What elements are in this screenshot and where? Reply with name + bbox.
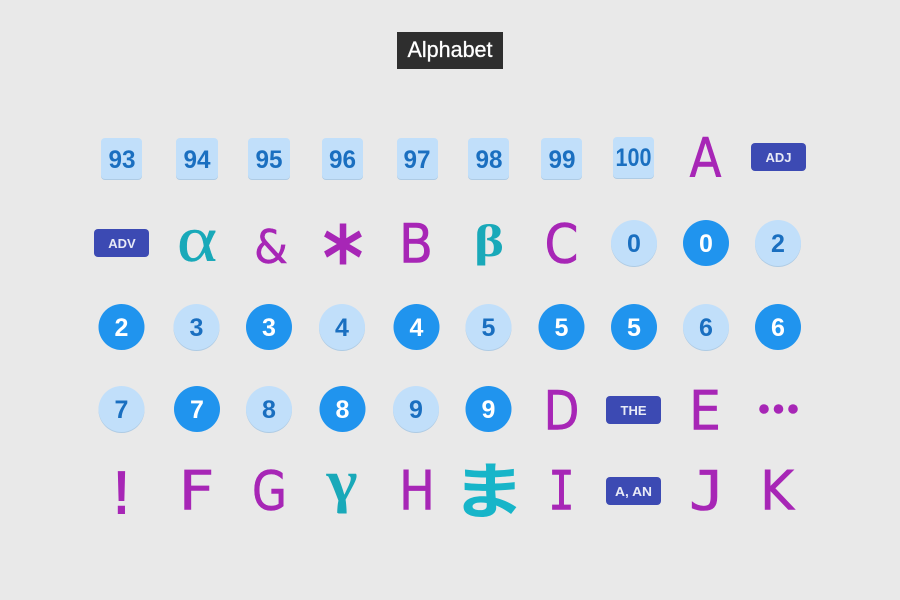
circle: 6 light [683, 304, 729, 351]
circle: 3 light: 3 [190, 314, 203, 342]
circle: 2 light: 2 [771, 230, 785, 258]
circle: 7 dark: 7 [190, 396, 204, 424]
tag: ADV [94, 229, 149, 257]
tile: 96: 96 [329, 146, 356, 174]
tile: 99 [541, 138, 582, 180]
letter: D: D [544, 380, 580, 442]
tile: 93 [101, 138, 142, 180]
circle: 2 dark [98, 304, 144, 350]
circle: 2 dark: 2 [115, 314, 128, 342]
circle: 9 light: 9 [409, 396, 423, 424]
circle: 9 dark [466, 386, 512, 432]
circle: 4 dark [394, 304, 440, 350]
tag: A, AN: A, AN [615, 484, 652, 499]
letter: F: F [178, 460, 214, 522]
tile: 94: 94 [184, 146, 211, 174]
circle: 8 light: 8 [262, 396, 276, 424]
tile: 100 [613, 137, 654, 179]
tag: A, AN [606, 477, 661, 505]
letter: H: H [399, 460, 435, 522]
circle: 9 light [393, 386, 439, 433]
tag: ADJ [751, 143, 806, 171]
circle: 0 light: 0 [627, 230, 641, 258]
title [397, 32, 503, 69]
kana: ma: ま [452, 442, 526, 531]
circle: 2 light [755, 220, 801, 267]
letter: E: E [689, 380, 721, 442]
tile: 95 [248, 138, 290, 180]
greek: alpha: α [177, 203, 217, 276]
tile: 100: 100 [616, 144, 652, 172]
symbol: ellipsis [759, 404, 798, 414]
circle: 7 light [98, 386, 144, 433]
circle: 0 dark: 0 [699, 230, 713, 258]
circle: 4 dark: 4 [410, 314, 424, 342]
letter: G: G [252, 460, 287, 522]
circle: 4 light [319, 304, 365, 351]
symbol: exclamation: ! [113, 459, 130, 528]
circle: 6 dark [755, 304, 801, 350]
tile: 93: 93 [108, 146, 136, 174]
circle: 3 dark: 3 [262, 314, 276, 342]
tile: 95: 95 [256, 146, 283, 174]
tag: THE: THE [620, 403, 647, 418]
circle: 3 dark [246, 304, 292, 350]
circle: 8 dark: 8 [336, 396, 350, 424]
circle: 5 dark: 5 [555, 314, 569, 342]
letter: I: I [548, 460, 575, 522]
circle: 0 dark [683, 220, 729, 266]
circle: 8 dark [320, 386, 366, 432]
circle: 8 light [246, 386, 292, 433]
tile: 96 [322, 138, 363, 180]
letter: K: K [760, 460, 796, 522]
greek: beta: β [474, 216, 504, 266]
title: Alphabet [408, 37, 492, 62]
symbol: ampersand: & [254, 220, 288, 274]
tile: 98 [468, 138, 509, 180]
circle: 7 light: 7 [115, 396, 128, 424]
tag: THE [606, 396, 661, 424]
circle: 0 light [611, 220, 657, 267]
circle: 9 dark: 9 [482, 396, 495, 424]
letter: C: C [544, 212, 578, 276]
circle: 5 light [466, 304, 512, 351]
tile: 97: 97 [404, 146, 430, 174]
tag: ADV: ADV [108, 236, 136, 251]
tile: 97 [397, 138, 438, 180]
greek: gamma: γ [325, 448, 358, 514]
letter: B: B [399, 212, 433, 276]
tag: ADJ: ADJ [765, 150, 792, 165]
circle: 5 dark [538, 304, 584, 350]
circle: 3 light [174, 304, 220, 351]
tile: 98: 98 [476, 146, 503, 174]
letter: A: A [690, 126, 722, 190]
tile: 94 [176, 138, 218, 180]
tile: 99: 99 [548, 146, 576, 174]
circle: 4 light: 4 [335, 314, 349, 342]
letter: J: J [689, 460, 725, 522]
circle: 5 dark [611, 304, 657, 350]
circle: 7 dark [174, 386, 220, 432]
circle: 6 dark: 6 [771, 314, 785, 342]
circle: 5 dark: 5 [627, 314, 641, 342]
symbol: asterisk: * [322, 207, 364, 310]
circle: 6 light: 6 [699, 314, 713, 342]
circle: 5 light: 5 [482, 314, 496, 342]
